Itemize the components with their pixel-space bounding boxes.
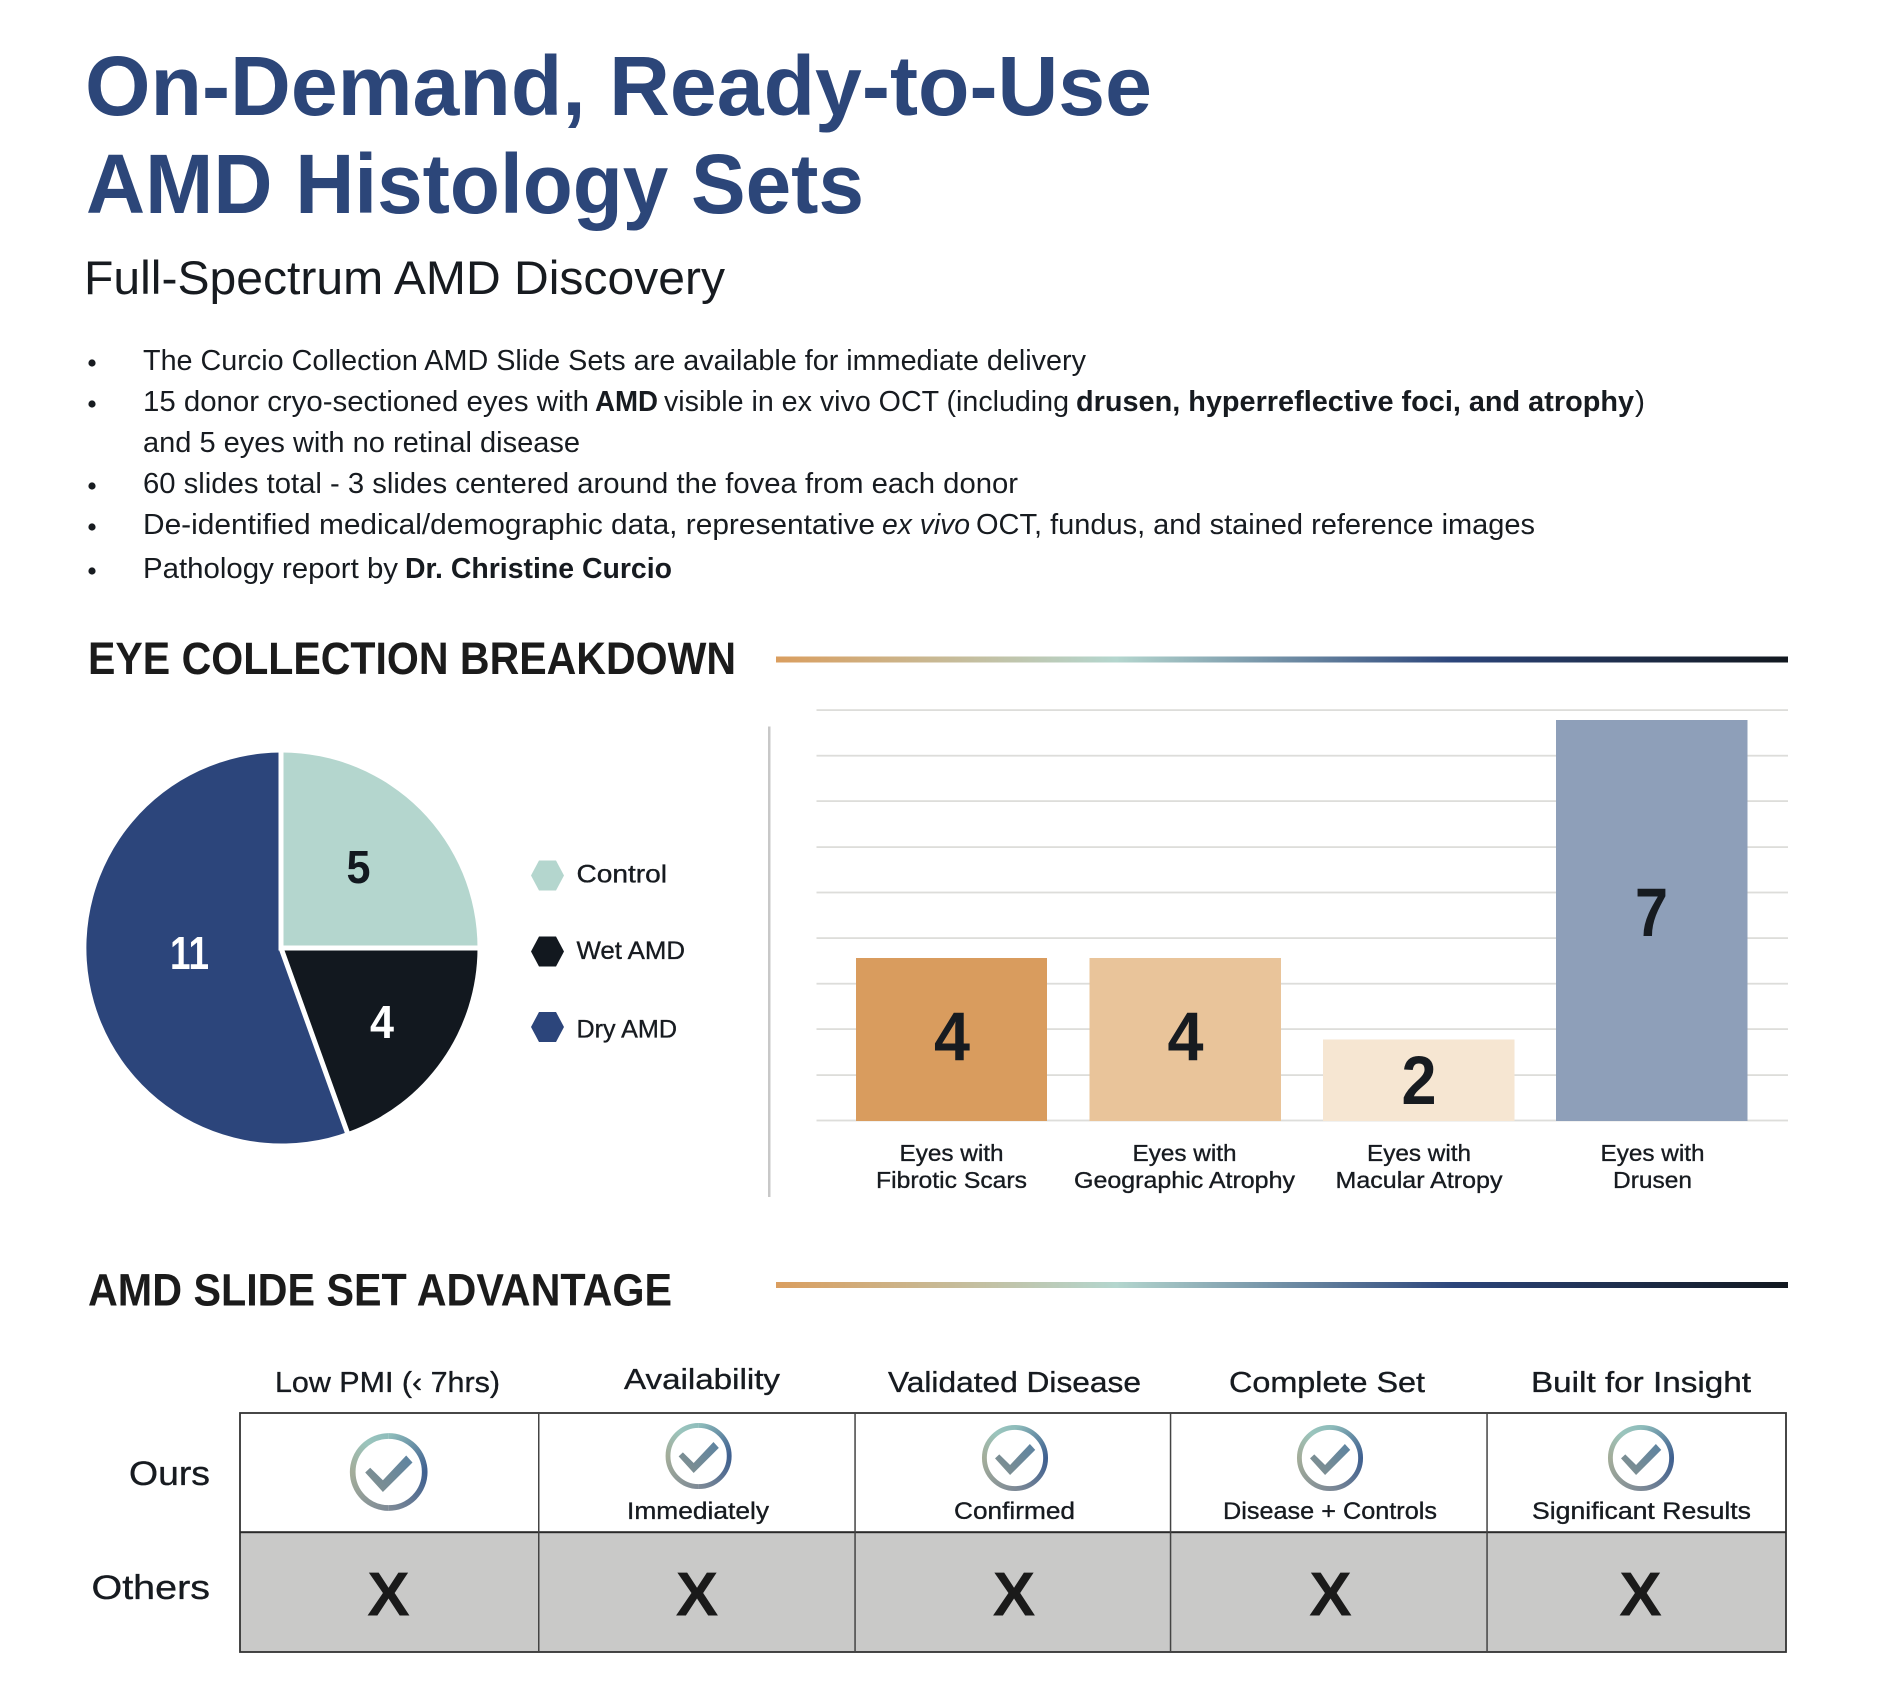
icon: check built for insight xyxy=(1610,1427,1672,1489)
legend item: dry AMD: Dry AMD xyxy=(576,1016,677,1044)
bullet: de-identified data: OCT, fundus, and stained reference images xyxy=(976,509,1535,541)
legend item: wet AMD: Wet AMD xyxy=(576,937,685,965)
column headers: Built for Insight xyxy=(1531,1367,1751,1399)
row: others: X xyxy=(1619,1561,1662,1630)
subtitle: Full-Spectrum AMD Discovery xyxy=(84,251,726,304)
row: others xyxy=(367,1561,1662,1630)
bullet: de-identified data: De-identified medical/demographic data, representative xyxy=(143,509,875,541)
bullet: pathology report xyxy=(88,553,672,585)
heading: eye collection breakdown: EYE COLLECTION BREAKDOWN xyxy=(88,633,736,684)
bar chart xyxy=(816,709,1788,1193)
vertical divider xyxy=(768,726,770,1197)
row: ours xyxy=(353,1425,1751,1525)
bar: macular atropy: Macular Atropy xyxy=(1336,1167,1503,1193)
bar: macular atropy xyxy=(1323,1040,1514,1193)
bar: fibrotic scars: Eyes with xyxy=(900,1140,1004,1166)
bullet: pathology report: Dr. Christine Curcio xyxy=(405,553,672,585)
title: On-Demand, Ready-to-Use xyxy=(85,39,1152,133)
legend item: control xyxy=(531,860,667,890)
column headers: Validated Disease xyxy=(888,1367,1141,1399)
bar: geographic atrophy: 4 xyxy=(1168,998,1204,1075)
gradient rule: breakdown xyxy=(776,656,1788,662)
legend item: wet AMD xyxy=(531,936,685,966)
bullet: immediate delivery: The Curcio Collection AMD Slide Sets are available for immediate delivery xyxy=(143,345,1086,377)
bar: macular atropy: 2 xyxy=(1402,1042,1436,1119)
bullet: slides total: 60 slides total - 3 slides centered around the fovea from each donor xyxy=(143,468,1018,500)
icon: check low PMI xyxy=(353,1436,425,1508)
pie value: 4: 4 xyxy=(370,996,394,1048)
bullet: donor eyes: drusen, hyperreflective foci, and atrophy xyxy=(1076,386,1634,418)
slice: control xyxy=(282,752,478,948)
captions: Immediately xyxy=(627,1498,770,1525)
slice: dry AMD xyxy=(86,752,349,1144)
column headers: Low PMI (‹ 7hrs) xyxy=(275,1367,500,1399)
title: AMD Histology Sets xyxy=(86,137,864,231)
pie chart xyxy=(86,745,484,1144)
captions: Confirmed xyxy=(954,1498,1075,1525)
pie value: 5: 5 xyxy=(346,841,370,893)
legend xyxy=(531,860,685,1044)
bullet: donor eyes: visible in ex vivo OCT (including xyxy=(664,386,1069,418)
row: others: X xyxy=(992,1561,1036,1630)
column headers: Availability xyxy=(624,1364,781,1396)
bar: geographic atrophy: Geographic Atrophy xyxy=(1074,1167,1295,1193)
column headers xyxy=(275,1364,1751,1399)
row labels: Others xyxy=(92,1569,210,1607)
bar: fibrotic scars: 4 xyxy=(934,998,970,1075)
pie value: 11: 11 xyxy=(170,927,209,979)
table grid xyxy=(240,1413,1786,1652)
row: others: X xyxy=(676,1561,718,1630)
bar: geographic atrophy xyxy=(1074,958,1295,1193)
bar: geographic atrophy: Eyes with xyxy=(1132,1140,1236,1166)
captions xyxy=(627,1498,1751,1525)
icon: check complete set xyxy=(1299,1427,1361,1489)
row: others: X xyxy=(1309,1561,1352,1630)
comparison table xyxy=(92,1364,1786,1652)
slice: wet AMD xyxy=(282,948,478,1132)
icon: check validated disease xyxy=(984,1427,1046,1489)
row: others: X xyxy=(367,1561,410,1630)
bullet: pathology report: Pathology report by xyxy=(143,553,399,585)
bullet: donor eyes: and 5 eyes with no retinal disease xyxy=(143,427,580,459)
bullet: donor eyes: ) xyxy=(1635,386,1645,418)
captions: Disease + Controls xyxy=(1223,1498,1437,1525)
column headers: Complete Set xyxy=(1229,1367,1425,1399)
bar: drusen: 7 xyxy=(1635,874,1668,951)
heading: amd slide set advantage: AMD SLIDE SET ADVANTAGE xyxy=(88,1264,672,1316)
bullet: donor eyes xyxy=(88,386,1645,459)
bullet: donor eyes: AMD xyxy=(595,386,658,418)
bar: macular atropy: Eyes with xyxy=(1367,1140,1471,1166)
bar: drusen xyxy=(1556,720,1748,1193)
legend item: control: Control xyxy=(576,860,667,888)
bullet: de-identified data: ex vivo xyxy=(882,509,970,541)
bar: fibrotic scars xyxy=(856,958,1047,1193)
icon: check availability xyxy=(668,1425,729,1487)
bar: drusen: Drusen xyxy=(1613,1167,1692,1193)
bullet: de-identified data xyxy=(88,509,1535,541)
bullet list xyxy=(88,345,1645,585)
bar: drusen: Eyes with xyxy=(1600,1140,1704,1166)
bullet: donor eyes: 15 donor cryo-sectioned eyes with xyxy=(143,386,589,418)
gradient rule: advantage xyxy=(776,1282,1788,1288)
title xyxy=(85,39,1152,231)
legend item: dry AMD xyxy=(531,1012,677,1044)
bar: fibrotic scars: Fibrotic Scars xyxy=(876,1167,1027,1193)
row labels: Ours xyxy=(129,1455,210,1493)
row labels xyxy=(92,1455,210,1607)
captions: Significant Results xyxy=(1532,1498,1751,1525)
